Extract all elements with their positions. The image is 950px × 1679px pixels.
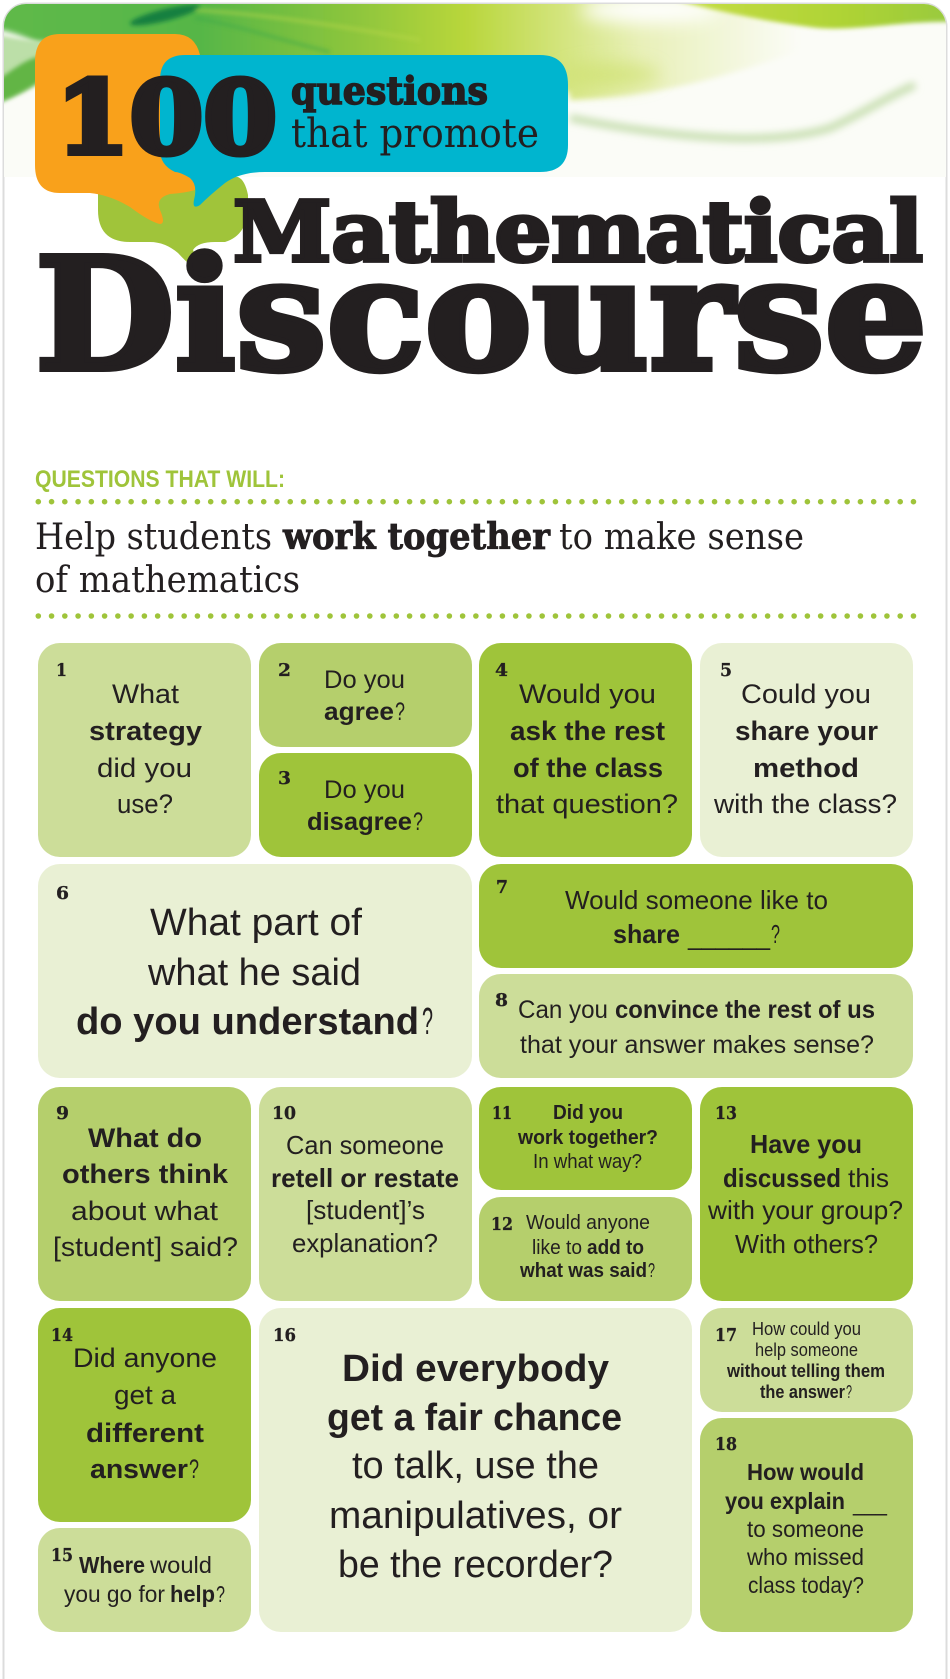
card 7: Would someone like to [565,885,828,915]
card 8 [479,974,913,1078]
card 9: about what [71,1196,219,1226]
card 15: would [149,1552,212,1578]
card 8: 8 [495,990,508,1011]
card 18: you explain [725,1488,845,1514]
speech bubble: green [98,177,248,266]
card 16 [259,1308,692,1632]
card 15: you go for [64,1581,165,1607]
card 10: explanation? [292,1228,438,1258]
card 12: Would anyone [526,1212,650,1234]
card 18 [700,1418,913,1632]
card 8: Can you [518,996,608,1024]
card 6: What part of [150,902,362,944]
card 16: 16 [273,1325,296,1346]
card 9: What do [88,1123,202,1153]
card 15 [38,1528,251,1632]
card 1: 1 [56,660,67,681]
card 13: with your group? [707,1195,903,1225]
card 18: who missed [746,1544,864,1570]
section heading: of mathematics [35,560,300,601]
card 8: convince the rest of us [615,996,875,1024]
card 9 [38,1087,251,1301]
card 17: help someone [755,1340,858,1360]
card 14: different [86,1418,204,1448]
card 1: did you [97,753,192,783]
card 2: agree [324,698,394,726]
card 2: Do you [324,666,405,694]
card 9: others think [62,1159,229,1189]
card 17: the answer [760,1382,845,1402]
card 11: work together? [517,1127,658,1149]
card 11: In what way? [533,1151,642,1173]
card 12: like to [532,1237,582,1259]
card 6: do you understand [76,1001,419,1043]
speech bubble: blue [160,55,568,207]
card 13: With others? [735,1229,878,1259]
card 10: Can someone [286,1130,444,1160]
card 17: without telling them [726,1361,885,1381]
card 2: ? [395,698,405,726]
card 13 [700,1087,913,1301]
card 4: that question? [496,789,678,819]
card 4 [479,643,692,857]
title: Mathematical: Mathematical [233,183,923,281]
card 7: ? [771,919,780,949]
card 14: 14 [51,1325,73,1346]
card 5 [700,643,913,857]
title [35,59,927,406]
card 13: this [848,1163,889,1193]
section heading [35,516,804,601]
section heading: Help students [35,517,272,558]
card 10 [259,1087,472,1301]
card 14 [38,1308,251,1522]
card 10: retell or restate [271,1163,459,1193]
card 3: 3 [278,768,291,789]
card 11: Did you [553,1102,623,1124]
card 12: 12 [491,1214,513,1235]
card 10: [student]’s [306,1195,425,1225]
card 5: with the class? [713,789,897,819]
card 7: share [613,919,680,949]
card 5: Could you [741,679,871,709]
card 14: answer [90,1454,189,1484]
card 2 [259,643,472,747]
card 15: 15 [51,1545,73,1566]
card 4: ask the rest [510,716,665,746]
card 3: disagree [307,808,412,836]
card 6: ? [422,1001,433,1043]
card 18: How would [747,1459,864,1485]
card 6: what he said [147,952,361,994]
card 10: 10 [272,1103,296,1124]
section heading: to make sense [559,517,804,558]
card 1: use? [117,789,173,819]
title: questions: questions [291,68,488,113]
card 12: ? [648,1260,655,1282]
header green wave background [0,0,950,177]
card 9: 9 [56,1103,69,1124]
card 4: Would you [519,679,656,709]
card 1: strategy [89,716,202,746]
title: Discourse: Discourse [35,223,927,406]
card 16: be the recorder? [338,1544,613,1586]
card 15: Where [79,1552,145,1578]
card 9: [student] said? [53,1232,238,1262]
card 1: What [112,679,180,709]
card 1 [38,643,251,857]
card 17 [700,1308,913,1412]
card 4: 4 [495,660,508,681]
section heading: work together [282,516,551,558]
card 11 [479,1087,692,1190]
card 11: 11 [492,1103,512,1124]
card 17: How could you [752,1319,861,1339]
card 3: Do you [324,776,405,804]
section label: QUESTIONS THAT WILL: [35,466,285,493]
card 13: Have you [750,1129,862,1159]
card 12: what was said [519,1260,647,1282]
card 7 [479,864,913,968]
card 13: discussed [723,1163,841,1193]
card 14: get a [114,1380,177,1410]
card 16: manipulatives, or [329,1495,622,1537]
card 18: ___ [852,1490,888,1516]
card 17: ? [846,1382,852,1402]
speech bubble: orange [35,34,200,224]
card 5: method [753,753,859,783]
card 5: share your [735,716,879,746]
card 8: that your answer makes sense? [520,1031,874,1059]
card 6: 6 [56,883,69,904]
card 12: add to [587,1237,644,1259]
card 14: Did anyone [73,1343,217,1373]
card 12 [479,1197,692,1301]
card 2: 2 [278,660,291,681]
card 3 [259,753,472,857]
card 18: 18 [715,1434,737,1455]
title: that promote: that promote [291,111,539,157]
card 16: Did everybody [342,1348,609,1390]
card 16: get a fair chance [327,1397,622,1439]
card 3: ? [413,808,423,836]
title: 100: 100 [56,59,277,177]
card 6 [38,864,472,1078]
card 14: ? [189,1454,199,1484]
card 15: ? [216,1581,225,1607]
card 7: ______ [687,921,771,951]
card 18: to someone [747,1516,864,1542]
card 16: to talk, use the [352,1445,599,1487]
card 7: 7 [496,877,508,898]
card 4: of the class [513,753,663,783]
card 5: 5 [720,660,732,681]
card 15: help [170,1581,215,1607]
card 13: 13 [715,1103,737,1124]
card 18: class today? [748,1572,864,1598]
card 17: 17 [715,1325,737,1346]
